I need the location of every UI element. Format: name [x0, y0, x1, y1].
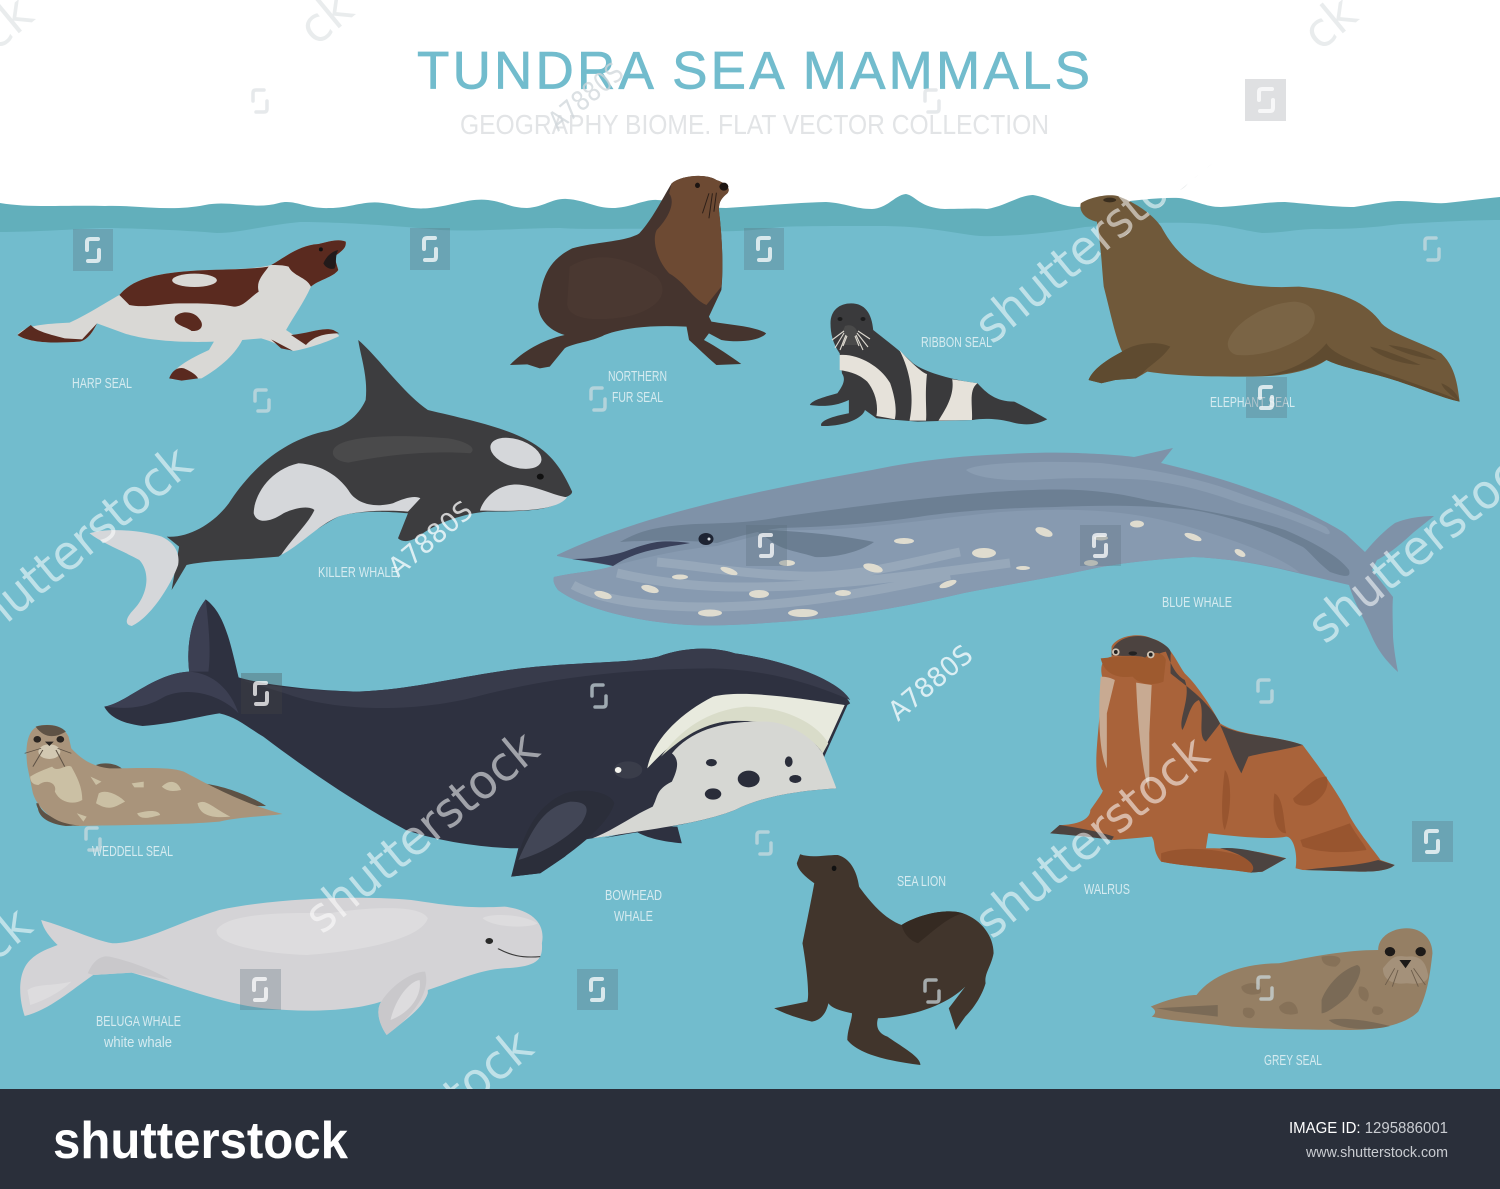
label: walrus: WALRUS — [1084, 881, 1130, 898]
label: northern fur seal — [608, 368, 667, 406]
animal: blue whale — [554, 448, 1434, 672]
animal: bowhead whale — [104, 599, 850, 877]
animal: beluga whale — [20, 898, 543, 1035]
animal: grey seal — [1151, 928, 1432, 1030]
label: blue whale: BLUE WHALE — [1162, 594, 1232, 611]
animal: elephant seal — [1080, 195, 1460, 402]
label: elephant seal: ELEPHANT SEAL — [1210, 394, 1295, 411]
watermark: stock wordmarks: shutterstock — [964, 130, 1220, 354]
label: grey seal: GREY SEAL — [1264, 1052, 1322, 1069]
footer bar — [0, 1089, 1500, 1189]
watermark: stock wordmarks: shutterstock — [964, 725, 1220, 949]
label: bowhead whale — [605, 887, 662, 925]
label: beluga whale — [96, 1013, 181, 1051]
watermark: stock wordmarks: shutterstock — [294, 720, 550, 944]
animal: ribbon seal — [810, 303, 1047, 426]
animal: weddell seal — [25, 725, 282, 826]
animal: killer whale — [90, 340, 572, 626]
subtitle: GEOGRAPHY BIOME. FLAT VECTOR COLLECTION — [460, 109, 1049, 140]
title: TUNDRA SEA MAMMALS — [417, 42, 1090, 100]
label: weddell seal: WEDDELL SEAL — [92, 843, 173, 860]
species labels — [72, 334, 1322, 1069]
ocean background — [0, 212, 1500, 1089]
animal: walrus — [1050, 635, 1395, 873]
footer image id: IMAGE ID: 1295886001 — [1289, 1120, 1448, 1137]
label: sea lion: SEA LION — [897, 873, 946, 890]
animal: sea lion — [774, 854, 994, 1065]
label: northern fur seal: NORTHERN — [608, 368, 667, 385]
watermark: square stamp icons — [73, 79, 1453, 1010]
label: beluga whale: white whale — [103, 1034, 172, 1051]
wave band — [0, 194, 1500, 236]
label: bowhead whale: BOWHEAD — [605, 887, 662, 904]
label: beluga whale: BELUGA WHALE — [96, 1013, 181, 1030]
label: bowhead whale: WHALE — [614, 908, 653, 925]
footer url: www.shutterstock.com — [1305, 1145, 1448, 1161]
label: northern fur seal: FUR SEAL — [612, 389, 663, 406]
watermark: stock wordmarks: A7880S — [543, 57, 630, 137]
animal: harp seal — [17, 240, 346, 381]
animal: northern fur seal — [510, 176, 766, 368]
label: harp seal: HARP SEAL — [72, 375, 132, 392]
label: killer whale: KILLER WHALE — [318, 564, 398, 581]
watermark: stock wordmarks: shutterstock — [964, 130, 1220, 354]
footer logo: shutterstock — [53, 1112, 348, 1170]
watermark: stock wordmarks: A7880S — [883, 639, 979, 727]
watermark: stock wordmarks: A7880S — [383, 495, 479, 583]
label: ribbon seal: RIBBON SEAL — [921, 334, 992, 351]
